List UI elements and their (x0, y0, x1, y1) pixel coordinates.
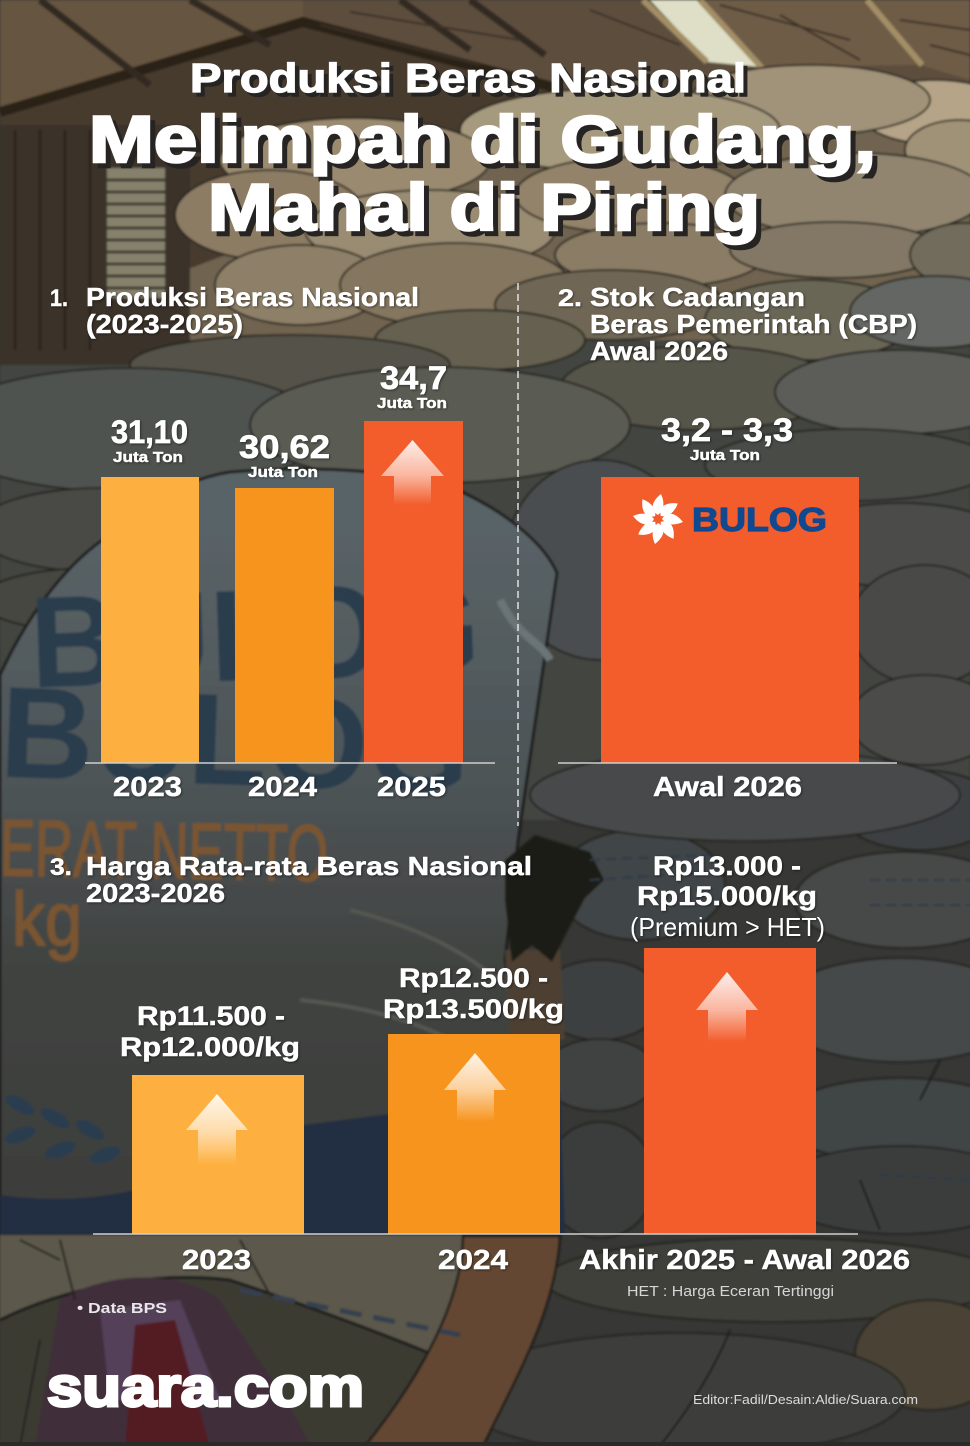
period labels: Akhir 2025 - Awal 2026 (579, 1244, 910, 1275)
panel: harga rata-rata beras (50, 851, 910, 1300)
sack wrinkles on stock side (300, 910, 520, 1080)
icon: bulog logo: BULOG (692, 501, 827, 538)
credit: Editor:Fadil/Desain:Aldie/Suara.com (693, 1392, 918, 1407)
bar 2024 (235, 488, 334, 763)
value 2023 (111, 414, 188, 466)
big sack (0, 469, 560, 1234)
bar stok (601, 477, 859, 763)
heading 3 (50, 851, 532, 908)
heading 1 (50, 282, 419, 339)
title (89, 55, 876, 244)
background: warehouse with rice sacks: kg (12, 877, 82, 962)
price label 2025-2026: Rp15.000/kg (637, 881, 817, 911)
icon: up arrow price 2023 (186, 1094, 248, 1165)
price label 2023: Rp12.000/kg (120, 1032, 300, 1062)
hair (505, 835, 604, 962)
icon: up arrow price 2025-2026 (696, 972, 758, 1042)
label awal 2026: Awal 2026 (653, 771, 802, 802)
middle layer (0, 368, 325, 492)
panel: produksi beras nasional (50, 282, 495, 802)
bar 2023 (101, 477, 199, 763)
price label 2024: Rp12.500 - (399, 963, 548, 993)
price label 2023: Rp11.500 - (137, 1001, 285, 1031)
background: warehouse with rice sacks: BULOG (0, 659, 472, 821)
heading 1: 1. (50, 285, 68, 312)
bar price 2025-2026 (644, 948, 816, 1234)
year labels: 2024 (248, 771, 317, 802)
left wall (0, 125, 190, 365)
price label 2025-2026: (Premium > HET) (630, 912, 825, 942)
icon: up arrow 2025 (381, 440, 444, 505)
big sack print: BULOG (27, 554, 482, 716)
roof and gable (0, 0, 970, 130)
axis 2 (558, 762, 897, 764)
heading 2: Beras Pemerintah (CBP) (590, 309, 917, 339)
price label 2024 (383, 963, 564, 1024)
shirt (0, 1092, 565, 1234)
icon: up arrow price 2024 (444, 1053, 506, 1122)
price label 2024: Rp13.500/kg (383, 994, 564, 1024)
bar price 2024 (388, 1034, 560, 1234)
bar price 2023 (132, 1075, 304, 1234)
face (505, 950, 565, 1040)
value 2024: 30,62 (239, 429, 330, 465)
note: HET: HET : Harga Eceran Tertinggi (627, 1283, 834, 1300)
heading 3: Harga Rata-rata Beras Nasional (86, 851, 532, 881)
wheat print (3, 1091, 122, 1167)
period labels: 2023 (182, 1244, 251, 1275)
heading 2: Stok Cadangan (590, 282, 805, 312)
heading 1: Produksi Beras Nasional (86, 282, 419, 312)
bar 2025 (364, 421, 463, 763)
axis 3 (93, 1233, 858, 1235)
value 2025: 34,7 (380, 360, 447, 396)
logo: suara.com: suara.com (47, 1355, 364, 1418)
panel: stok cadangan beras pemerintah (558, 282, 917, 802)
source note: • Data BPS (77, 1300, 167, 1317)
value 2023: 31,10 (111, 414, 188, 450)
purple cloth (35, 1278, 310, 1446)
background: warehouse with rice sacks: ERAT NETTO (0, 803, 329, 898)
heading 2 (558, 282, 917, 366)
title kicker: Produksi Beras Nasional (190, 55, 746, 101)
title line 2: Mahal di Piring (208, 170, 760, 244)
value stok: 3,2 - 3,3 (661, 412, 793, 448)
heading 3: 2023-2026 (86, 878, 225, 908)
value stok (661, 412, 793, 464)
value stok: Juta Ton (690, 447, 760, 464)
period labels: 2024 (438, 1244, 508, 1275)
year labels: 2025 (377, 771, 446, 802)
value 2025: Juta Ton (377, 395, 447, 412)
value 2024 (239, 429, 330, 481)
base tones (0, 80, 970, 350)
value 2024: Juta Ton (248, 464, 318, 481)
period labels (182, 1244, 910, 1275)
value 2023: Juta Ton (113, 449, 183, 466)
arm (365, 1236, 560, 1446)
axis 1 (85, 762, 495, 764)
heading 2: 2. (558, 285, 582, 312)
year labels: 2023 (113, 771, 182, 802)
right lower sacks (555, 830, 725, 940)
year labels (113, 771, 446, 802)
price label 2025-2026 (630, 851, 825, 942)
heading 1: (2023-2025) (86, 309, 243, 339)
tan beams (643, 0, 922, 68)
price label 2023 (120, 1001, 300, 1062)
value 2025 (377, 360, 447, 412)
skylight (650, 0, 760, 67)
price label 2025-2026: Rp13.000 - (653, 851, 801, 881)
sack lines (240, 1290, 460, 1335)
title line 1: Melimpah di Gudang, (89, 102, 876, 176)
icon: bulog logo (633, 494, 827, 544)
top pile (860, 80, 970, 144)
heading 3: 3. (50, 854, 72, 881)
divider: dashed vertical (517, 283, 519, 826)
heading 2: Awal 2026 (590, 336, 728, 366)
lower left sack (0, 1235, 470, 1446)
